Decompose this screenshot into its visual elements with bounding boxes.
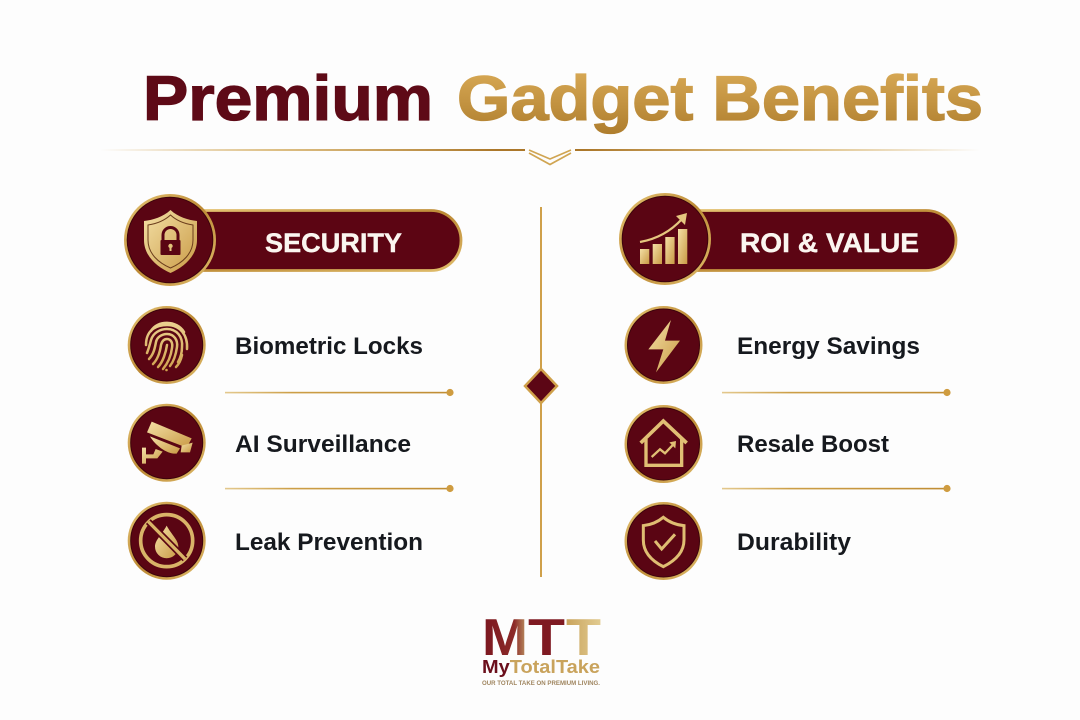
separator: energy / resale (722, 389, 951, 396)
logo: MyTotalTake: OUR TOTAL TAKE ON PREMIUM LIVING. (482, 681, 600, 687)
item: leak prevention (128, 502, 423, 580)
icon: rising bar chart (619, 193, 711, 285)
panel: security (124, 194, 461, 580)
title (143, 64, 983, 134)
label: Resale Boost (737, 431, 889, 458)
logo: MyTotalTake: M (482, 609, 528, 667)
logo: MyTotalTake: T (566, 609, 601, 667)
logo: MyTotalTake: MyTotalTake (482, 657, 600, 677)
roi header pill: ROI & VALUE (740, 228, 919, 258)
label: Durability (737, 529, 852, 556)
label: AI Surveillance (235, 431, 411, 458)
roi header pill (665, 210, 956, 270)
security header pill: SECURITY (265, 228, 402, 258)
icon: house with rising chart (624, 405, 702, 483)
icon: shield with check (624, 502, 702, 580)
security header pill (170, 210, 461, 270)
item: biometric locks (128, 306, 423, 384)
title: Premium (143, 64, 433, 134)
logo: MyTotalTake (482, 609, 601, 687)
icon: shield with padlock (124, 194, 216, 286)
item: energy savings (624, 306, 920, 384)
item: resale boost (624, 405, 889, 483)
separator: resale / durability (722, 485, 951, 492)
icon: fingerprint (128, 306, 206, 384)
title rule with chevron (100, 146, 980, 164)
label: Leak Prevention (235, 529, 423, 556)
separator: surveillance / leak (225, 485, 454, 492)
centre divider with diamond (525, 207, 557, 577)
icon: security camera (128, 404, 206, 482)
label: Energy Savings (737, 333, 920, 360)
panel: roi and value (619, 193, 956, 580)
title: Gadget Benefits (457, 64, 983, 134)
item: ai surveillance (128, 404, 411, 482)
logo: MyTotalTake: T (528, 609, 565, 667)
label: Biometric Locks (235, 333, 423, 360)
icon: lightning bolt (624, 306, 702, 384)
item: durability (624, 502, 852, 580)
separator: biometric / surveillance (225, 389, 454, 396)
icon: crossed water drop (128, 502, 206, 580)
